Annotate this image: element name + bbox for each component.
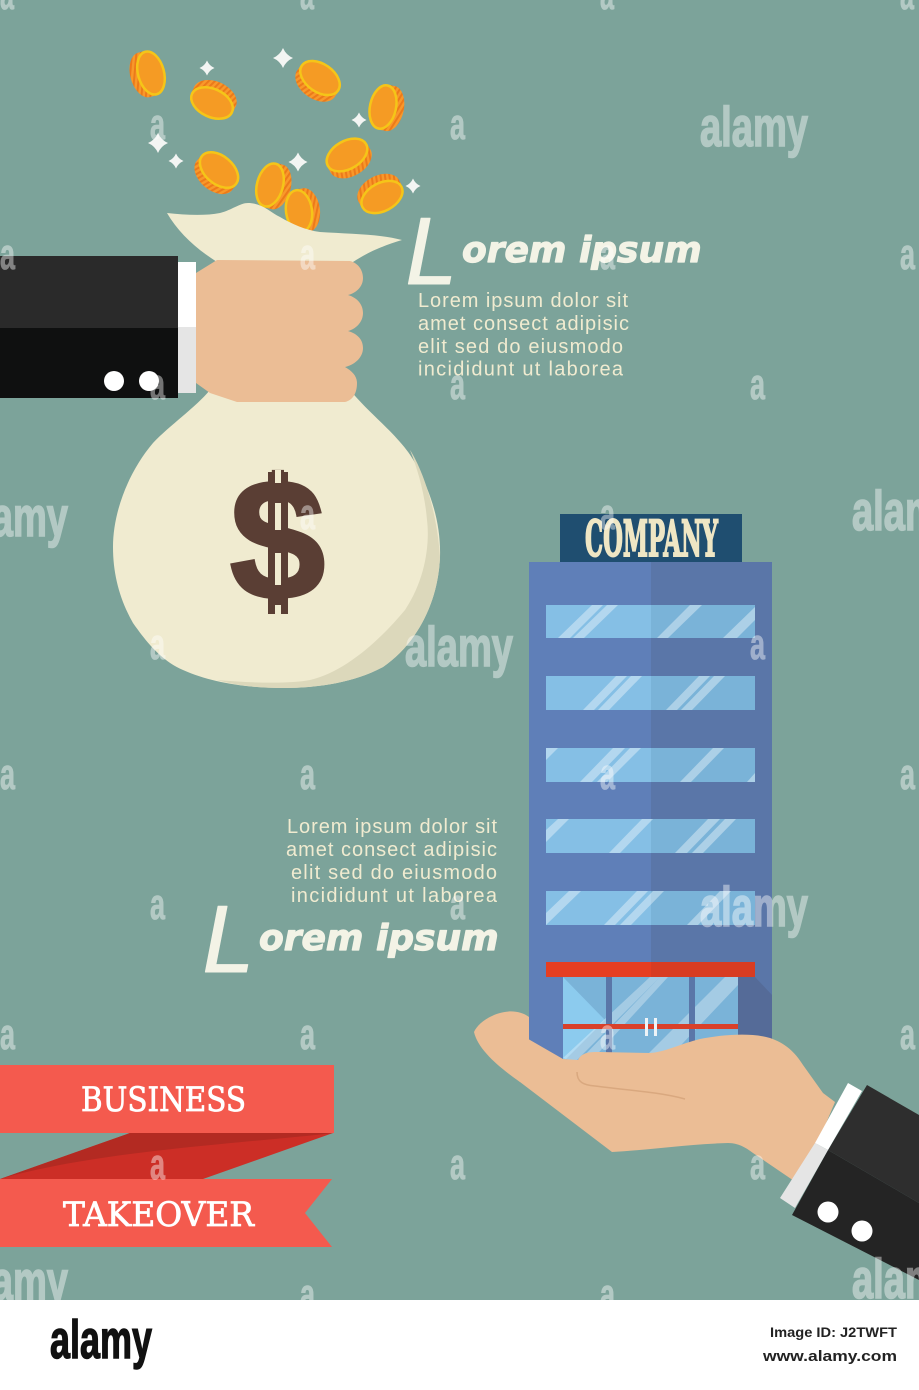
bag body	[113, 390, 440, 688]
windows row 3	[546, 748, 755, 782]
watermark pattern: a	[450, 360, 465, 409]
windows row 4	[546, 819, 755, 853]
company building	[529, 509, 772, 1062]
rooftop sign	[560, 514, 742, 562]
tower left face	[529, 562, 651, 1062]
shirt cuff	[178, 262, 196, 327]
windows row 1	[546, 605, 755, 638]
watermark pattern: a	[300, 1010, 315, 1059]
open palm	[505, 1033, 835, 1185]
text block: middle: Lorem ipsum dolor sit	[287, 816, 497, 838]
watermark pattern: a	[750, 360, 765, 409]
watermark pattern: a	[300, 1270, 315, 1319]
fist	[196, 260, 363, 402]
watermark pattern: a	[450, 1140, 465, 1189]
suit sleeve	[0, 256, 178, 328]
falling gold coins	[125, 48, 408, 234]
cuff white	[815, 1083, 862, 1150]
image id: Image ID: J2TWFT	[770, 1325, 898, 1340]
watermark pattern: alamy	[700, 95, 808, 158]
text block: middle	[286, 816, 498, 907]
right hand holding building	[474, 1011, 919, 1280]
heading: top right: L	[406, 201, 456, 306]
ribbon bottom band	[0, 1179, 332, 1247]
takeover label: TAKEOVER	[63, 1195, 255, 1235]
dollar sign: $	[230, 444, 325, 636]
sleeve buttons	[104, 371, 159, 391]
bag neck flare	[167, 203, 402, 262]
watermark pattern: a	[0, 230, 15, 279]
business label: BUSINESS	[81, 1080, 246, 1120]
alamy logo: alamy	[50, 1310, 152, 1370]
fingers behind tower	[474, 1011, 529, 1082]
watermark pattern: a	[600, 1010, 615, 1059]
watermark pattern: a	[150, 1140, 165, 1189]
windows row 2	[546, 676, 755, 710]
text block: top right: Lorem ipsum dolor sit	[418, 290, 628, 312]
company building: COMPANY	[585, 509, 719, 568]
watermark pattern: a	[0, 750, 15, 799]
watermark pattern: a	[150, 620, 165, 669]
watermark pattern: alamy	[405, 615, 513, 678]
watermark pattern: a	[600, 230, 615, 279]
ribbon top band	[0, 1065, 334, 1133]
ribbon banner	[0, 1065, 334, 1247]
tower right face	[651, 562, 772, 1062]
text block: top right: amet consect adipisic	[418, 313, 629, 335]
text block: middle: amet consect adipisic	[286, 839, 497, 861]
text block: middle: elit sed do eiusmodo	[291, 862, 497, 884]
sparkles	[148, 48, 420, 194]
watermark pattern: a	[150, 880, 165, 929]
watermark pattern: a	[300, 230, 315, 279]
website: www.alamy.com	[762, 1348, 897, 1365]
windows row 5	[546, 891, 755, 925]
watermark pattern: a	[300, 490, 315, 539]
red awning	[546, 962, 651, 977]
sleeve lower	[792, 1150, 919, 1280]
ribbon fold	[0, 1133, 333, 1179]
text block: top right: incididunt ut laborea	[418, 358, 624, 380]
heading: middle: orem ipsum	[259, 918, 499, 959]
watermark pattern: a	[300, 750, 315, 799]
heading: middle: L	[203, 889, 253, 994]
watermark pattern: a	[600, 490, 615, 539]
footer bar	[0, 1300, 919, 1390]
heading: top right: orem ipsum	[462, 230, 702, 271]
watermark pattern: a	[750, 620, 765, 669]
bag shading	[217, 450, 440, 688]
thumb crease	[577, 1072, 685, 1099]
left hand holding bag	[0, 256, 363, 402]
watermark pattern: a	[750, 1140, 765, 1189]
entrance door	[563, 977, 738, 1062]
watermark pattern: a	[450, 880, 465, 929]
sleeve buttons	[818, 1202, 872, 1242]
text block: top right	[418, 290, 629, 380]
watermark pattern: a	[600, 1270, 615, 1319]
watermark pattern: a	[150, 100, 165, 149]
watermark pattern: a	[150, 360, 165, 409]
watermark pattern: a	[0, 1010, 15, 1059]
sleeve upper	[828, 1085, 919, 1203]
money bag	[113, 203, 440, 688]
watermark pattern: a	[600, 750, 615, 799]
cuff grey	[780, 1143, 828, 1208]
text block: top right: elit sed do eiusmodo	[418, 336, 623, 358]
watermark pattern: alamy	[700, 875, 808, 938]
watermark pattern: a	[450, 100, 465, 149]
ribbon fold shadow	[0, 1133, 333, 1179]
text block: middle: incididunt ut laborea	[291, 885, 498, 907]
ground floor shadow	[738, 977, 772, 1062]
